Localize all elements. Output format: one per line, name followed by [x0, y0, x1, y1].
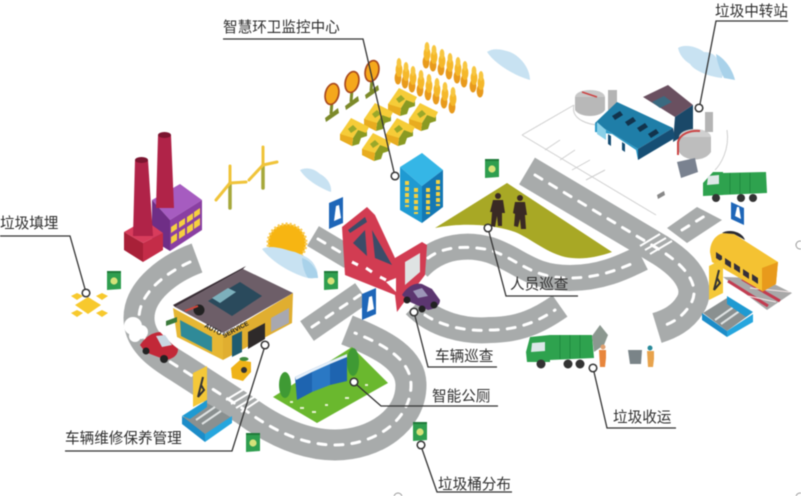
- icon: clouds: [300, 46, 735, 192]
- label: 车辆维修保养管理: 车辆维修保养管理: [65, 430, 182, 447]
- icon: wheat field: [395, 42, 484, 114]
- label: 车辆巡查: 车辆巡查: [435, 348, 494, 365]
- blue road sign right: [731, 202, 744, 225]
- green garbage truck bottom: [526, 325, 608, 368]
- auto service building: AUTO: [203, 323, 223, 337]
- blue road signs: [329, 197, 376, 320]
- label: 垃圾中转站: 垃圾中转站: [715, 3, 788, 20]
- smart toilets on lawn: [273, 347, 388, 423]
- workers and wheeled bin: [599, 344, 654, 367]
- road: left loop: [139, 258, 411, 445]
- road: lower curve: [415, 305, 560, 330]
- red suspension bridge: [342, 207, 427, 312]
- label: 垃圾桶分布: 垃圾桶分布: [438, 476, 511, 493]
- label: 垃圾桶分布: [417, 441, 512, 493]
- icon: sunflowers: [322, 58, 382, 122]
- label: 车辆维修保养管理: [65, 341, 269, 451]
- label: 智能公厕: [350, 378, 498, 406]
- green garbage truck top: [703, 172, 767, 202]
- road: middle segment: [307, 293, 362, 331]
- road: right long curve: [527, 171, 694, 328]
- office tower: [400, 153, 443, 223]
- road: bridge top segment: [313, 236, 350, 258]
- label: 垃圾填埋: [0, 215, 90, 297]
- icon: sun and cloud: [262, 224, 318, 279]
- parking lot outline: [522, 105, 728, 215]
- icon: caution sign right: [709, 259, 723, 300]
- blue pit right: [702, 296, 753, 337]
- label: 人员巡查: [484, 224, 578, 296]
- label: 车辆巡查: [410, 308, 497, 367]
- icon: solar panels: [340, 88, 438, 161]
- edge markers: [394, 241, 801, 496]
- icon: oil can: [231, 357, 251, 381]
- icon: recycling bins: [107, 159, 499, 452]
- label: 垃圾填埋: 垃圾填埋: [0, 215, 59, 232]
- label: 人员巡查: 人员巡查: [510, 276, 569, 293]
- label: 智能公厕: 智能公厕: [432, 387, 490, 405]
- auto service building: [166, 266, 293, 360]
- icon: caution sign left: [193, 366, 207, 407]
- olive field with patrol people: [435, 183, 612, 258]
- icon: landfill diamonds: [71, 293, 108, 317]
- label: 垃圾中转站: [695, 3, 788, 112]
- auto service building: SERVICE: [222, 320, 251, 340]
- road: small right segment: [667, 207, 722, 243]
- label: 垃圾收运: 垃圾收运: [613, 409, 672, 426]
- label: 智慧环卫监控中心: [223, 18, 399, 180]
- icon: wind turbines: [216, 147, 277, 208]
- purple car: [402, 284, 440, 312]
- transfer station: [575, 85, 713, 199]
- red car with smoke: [124, 317, 178, 363]
- yellow train on tracks: [710, 231, 792, 310]
- label: 智慧环卫监控中心: 智慧环卫监控中心: [223, 18, 340, 36]
- blue pit left: [182, 400, 232, 442]
- factory: [124, 132, 202, 262]
- crosswalks: [226, 234, 672, 412]
- road: upper S curve: [418, 247, 642, 278]
- label: 垃圾收运: [589, 364, 676, 428]
